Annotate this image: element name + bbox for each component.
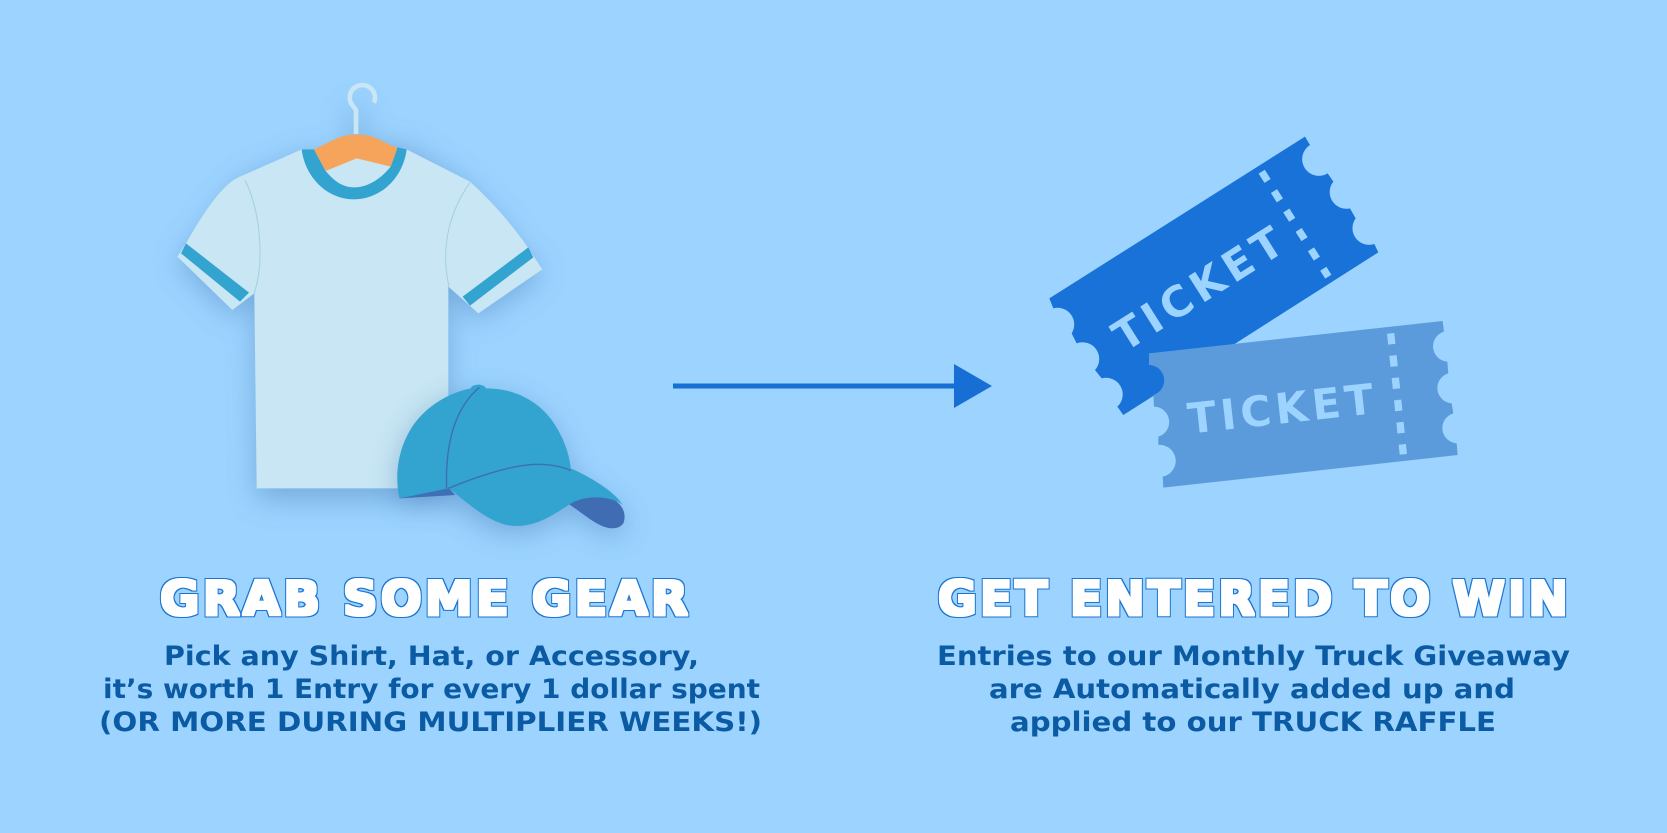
icon: light blue ticket: TICKET	[1185, 374, 1376, 444]
icon: dark blue ticket	[1049, 137, 1378, 415]
panel: tickets illustration	[1049, 137, 1458, 488]
heading: grab some gear: GRAB SOME GEAR	[160, 572, 691, 627]
icon: light blue ticket	[1149, 321, 1458, 488]
text block: gear description	[99, 641, 762, 738]
icon: t-shirt	[177, 147, 542, 488]
text block: entries description: applied to our TRUCK RAFFLE	[1010, 707, 1496, 738]
panel: gear illustration	[177, 85, 625, 535]
text block: gear description: (OR MORE DURING MULTIPLIER WEEKS!)	[99, 707, 762, 738]
text block: gear description: it’s worth 1 Entry for every 1 dollar spent	[103, 674, 760, 705]
text block: entries description: are Automatically added up and	[989, 674, 1515, 705]
text block: entries description	[937, 641, 1570, 738]
icon: dark blue ticket: TICKET	[1104, 217, 1292, 361]
icon: hanger	[314, 85, 397, 171]
text block: entries description: Entries to our Monthly Truck Giveaway	[937, 641, 1570, 672]
text block: gear description: Pick any Shirt, Hat, or Accessory,	[164, 641, 699, 672]
icon: baseball cap	[397, 385, 625, 528]
heading: get entered to win: GET ENTERED TO WIN	[938, 572, 1571, 627]
arrow	[673, 364, 992, 408]
